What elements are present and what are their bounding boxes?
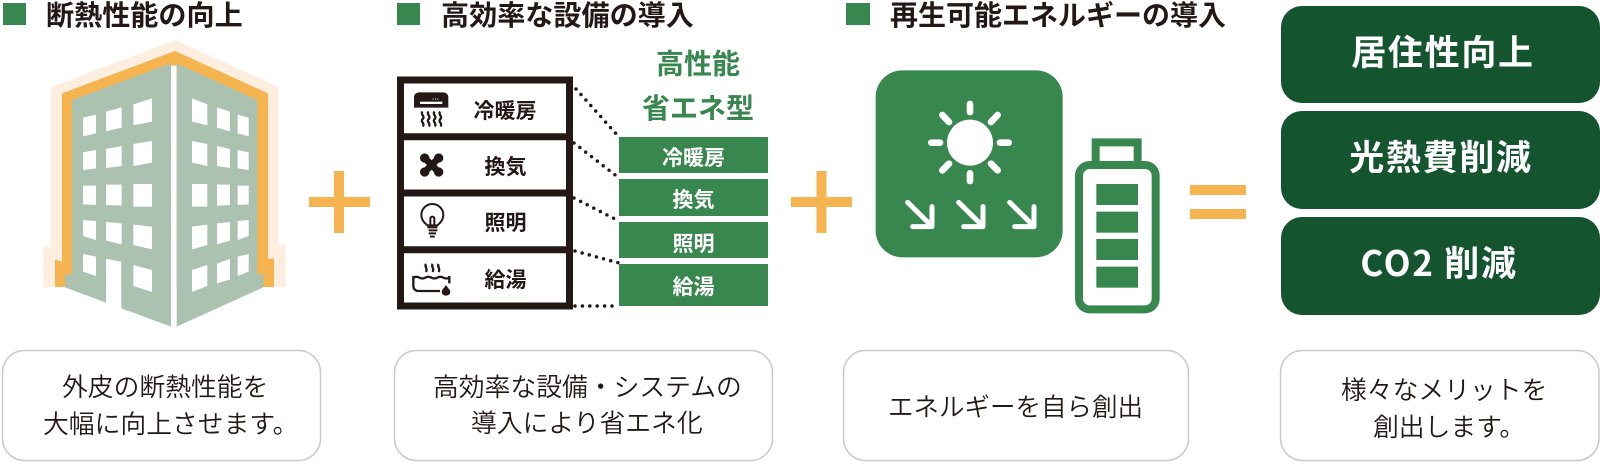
panel: high-efficiency equipment list: 給湯 [672,271,714,301]
plus sign 2 [791,171,852,233]
icon: solar panel [876,70,1063,257]
caption box 2: 導入により省エネ化 [471,403,703,440]
result: improved comfort: 居住性向上 [1351,25,1535,76]
icon: insulated building [43,40,286,327]
panel: high-efficiency equipment list: 照明 [672,228,714,258]
caption box 2: 高効率な設備・システムの [433,367,742,404]
icon: bath [413,264,450,296]
icon: light bulb [421,204,443,237]
caption box 2 [394,350,772,460]
result: CO2 reduction [1281,217,1600,315]
icon: air conditioner [414,92,448,126]
panel: high-efficiency equipment list: 冷暖房 [662,142,725,172]
result: CO2 reduction: CO2 削減 [1360,236,1518,287]
caption box 3 [844,350,1188,460]
panel: high-efficiency equipment list: 換気 [672,184,714,214]
caption box 4: 創出します。 [1373,407,1525,444]
panel: current equipment list [397,80,573,306]
caption box 1: 外皮の断熱性能を [62,367,268,404]
caption box 3: エネルギーを自ら創出 [888,387,1143,424]
icon: battery [1079,142,1156,309]
result: improved comfort [1281,6,1600,103]
caption box 1: 大幅に向上させます。 [43,404,298,441]
caption box 1 [2,350,320,460]
equals sign [1190,185,1246,219]
label: air conditioning: 冷暖房 [474,95,536,125]
panel: high-efficiency equipment list [619,137,768,306]
result: lower utility costs [1281,111,1600,209]
heading: high-performance energy-saving type: 高性能 [656,42,740,82]
label: ventilation: 換気 [484,151,526,181]
heading: high-performance energy-saving type [642,42,754,127]
plus sign 1 [309,171,370,233]
label: hot water: 給湯 [484,264,526,294]
label: lighting: 照明 [484,207,526,237]
dotted connector lines [574,89,619,306]
result: lower utility costs: 光熱費削減 [1349,130,1533,181]
heading: high-performance energy-saving type: 省エネ型 [642,87,754,127]
caption box 4: 様々なメリットを [1341,370,1547,407]
icon: fan [420,153,443,177]
caption box 4 [1280,350,1599,460]
